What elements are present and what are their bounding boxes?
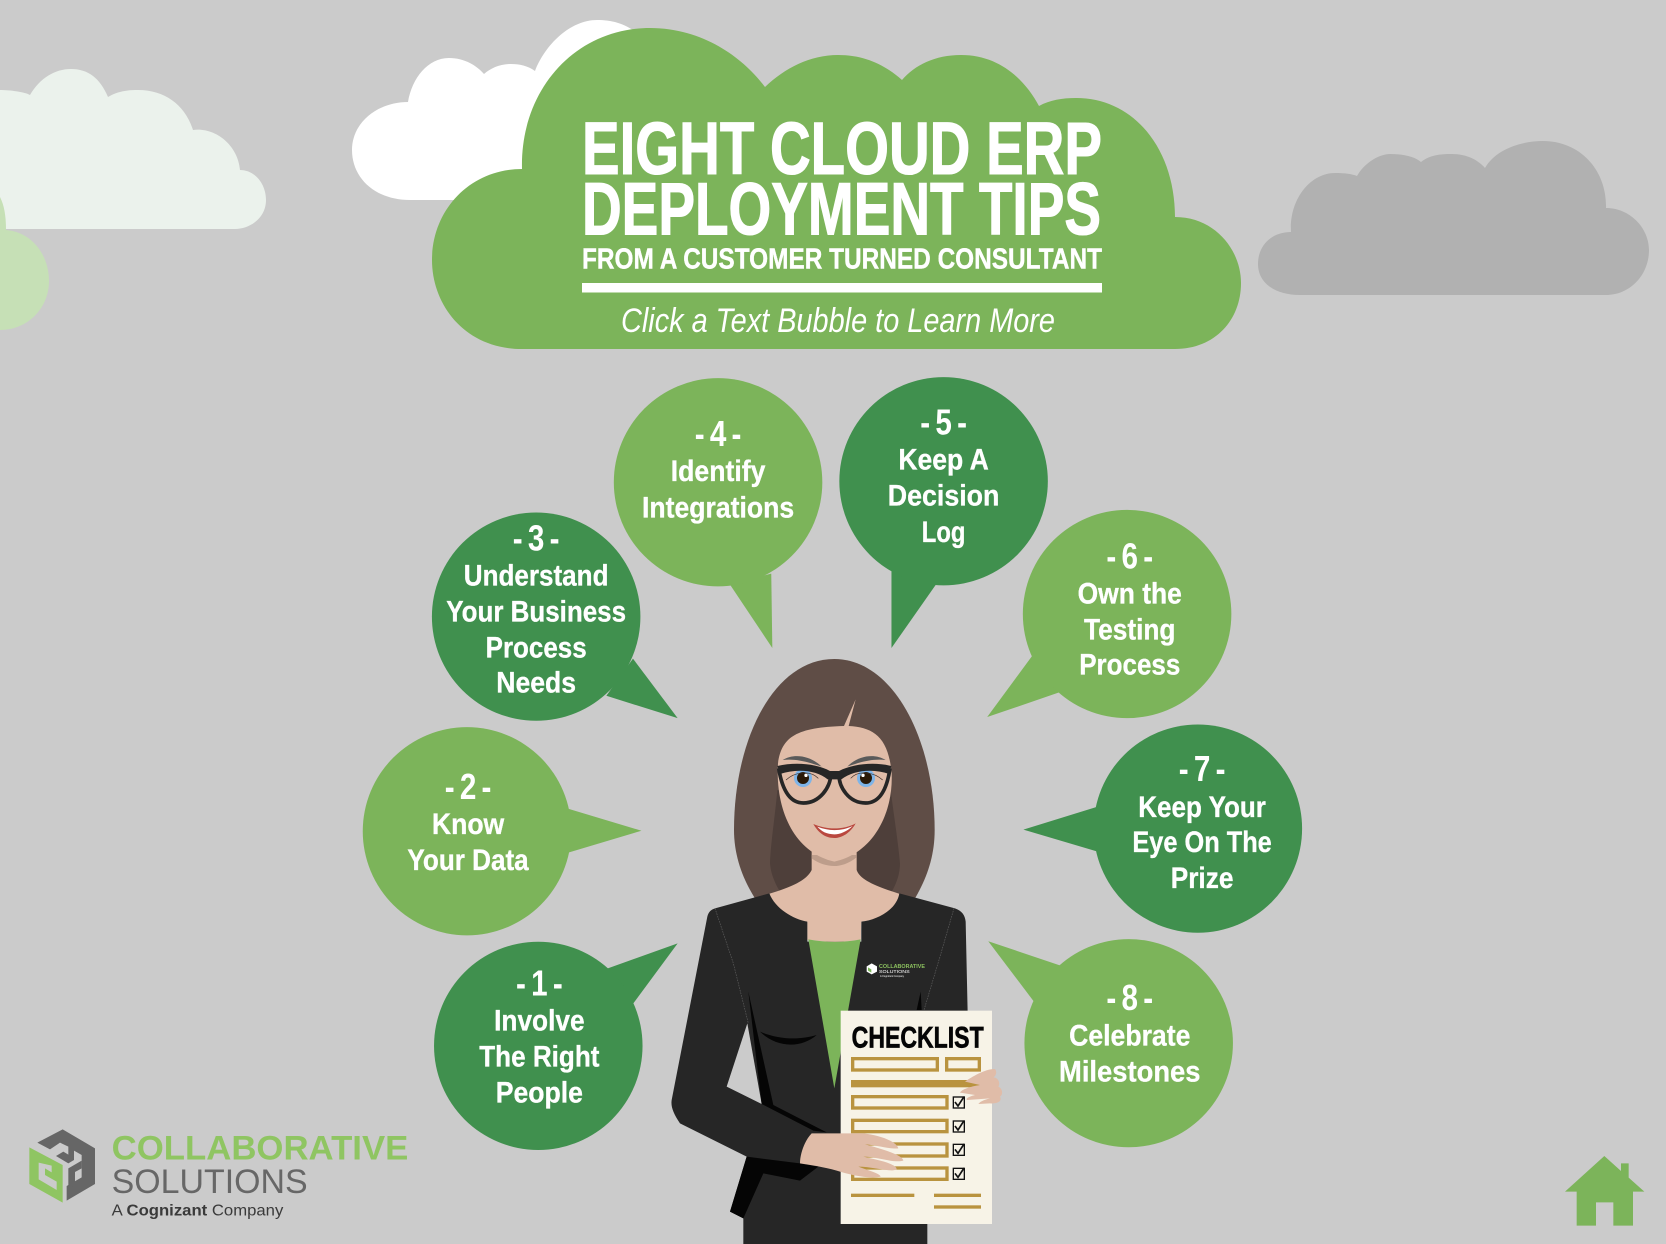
- bubble 4: Identify Integrations: Identify: [671, 456, 766, 488]
- jacket: [671, 893, 968, 1244]
- eyebrows: [783, 756, 886, 767]
- cloud: pale green left edge: [0, 197, 49, 330]
- bubble 1: Involve The Right People: [434, 942, 678, 1150]
- panel: title cloud: [432, 28, 1241, 349]
- bubble 5: Keep A Decision Log: -5-: [920, 403, 972, 443]
- icon: home: [1565, 1156, 1644, 1226]
- bubble 3: Understand Your Business Process Needs: -3-: [513, 519, 565, 559]
- bubble 4: Identify Integrations: -4-: [695, 414, 747, 455]
- jacket logo: A Cognizant Company: [880, 974, 904, 978]
- logo wordmark second line: SOLUTIONS: [112, 1163, 308, 1201]
- bubble 5: Keep A Decision Log: Keep A: [898, 445, 989, 477]
- bubble 2: Know Your Data: [363, 727, 641, 935]
- bubble 1: Involve The Right People: Involve: [494, 1005, 585, 1037]
- green cloud shape: [432, 28, 1241, 349]
- illustration: consultant head: [734, 659, 935, 940]
- checkboxes: [953, 1097, 964, 1179]
- sleeve gap: [727, 1023, 762, 1104]
- bubble 8: Celebrate Milestones: -8-: [1106, 979, 1158, 1019]
- bubble 6: Own the Testing Process: -6-: [1106, 537, 1158, 577]
- checklist lines: [851, 1080, 981, 1209]
- bubble 3: Understand Your Business Process Needs: Understand: [464, 560, 608, 592]
- checklist fields: [853, 1059, 979, 1179]
- bubble 5: Keep A Decision Log: Decision: [888, 481, 999, 513]
- bubble 8: Celebrate Milestones: [988, 939, 1233, 1147]
- click prompt: Click a Text Bubble to Learn More: [621, 302, 1055, 340]
- bubble 6: Own the Testing Process: Own the: [1078, 578, 1182, 610]
- jacket logo: SOLUTIONS: [879, 969, 910, 975]
- bubble 1: Involve The Right People: The Right: [479, 1042, 600, 1074]
- jacket shadows: [730, 992, 922, 1218]
- title: EIGHT CLOUD ERP: [582, 107, 1102, 190]
- subtitle: FROM A CUSTOMER TURNED CONSULTANT: [582, 244, 1102, 276]
- logo wordmark: COLLABORATIVE: [112, 1130, 408, 1168]
- bubble 4: Identify Integrations: [614, 378, 822, 648]
- bubble 3: Understand Your Business Process Needs: [432, 513, 678, 721]
- cloud: pale left: [0, 69, 266, 229]
- face: [778, 699, 892, 862]
- hand on sleeve: [800, 1133, 903, 1177]
- logo cube icon: [29, 1129, 95, 1203]
- logo tagline: A Cognizant Company: [112, 1203, 283, 1220]
- bubble 4: Identify Integrations: Integrations: [642, 492, 794, 524]
- bubble 5: Keep A Decision Log: Log: [922, 517, 965, 549]
- mouth: [813, 823, 856, 838]
- cloud: gray right: [1258, 141, 1649, 295]
- green shirt: [808, 939, 861, 1088]
- company logo: [29, 1129, 408, 1220]
- bubble 7: Keep Your Eye On The Prize: -7-: [1179, 749, 1231, 790]
- bubble 3: Understand Your Business Process Needs: Process: [486, 633, 587, 665]
- neck base: [807, 920, 861, 942]
- bubble 7: Keep Your Eye On The Prize: Prize: [1171, 863, 1233, 895]
- title: DEPLOYMENT TIPS: [582, 168, 1101, 250]
- checklist heading: CHECKLIST: [852, 1021, 984, 1054]
- eyes: [786, 769, 883, 787]
- bubble 1: Involve The Right People: People: [496, 1078, 583, 1110]
- bubble 6: Own the Testing Process: Testing: [1084, 615, 1175, 646]
- bubble 7: Keep Your Eye On The Prize: Eye On The: [1132, 827, 1272, 859]
- bubble 5: Keep A Decision Log: [839, 377, 1048, 648]
- bubble 3: Understand Your Business Process Needs: Your Business: [446, 596, 626, 628]
- jacket logo: [867, 963, 925, 978]
- chin shadow: [812, 855, 857, 866]
- bubble 6: Own the Testing Process: [987, 510, 1231, 718]
- neck: [768, 850, 900, 940]
- title: [582, 107, 1102, 250]
- inner hair shadow: [770, 790, 900, 892]
- bubble 6: Own the Testing Process: Process: [1079, 650, 1180, 682]
- bubble 7: Keep Your Eye On The Prize: [1023, 724, 1302, 933]
- illustration: consultant body: [671, 893, 1002, 1244]
- bubble 1: Involve The Right People: -1-: [516, 964, 568, 1004]
- bubble 7: Keep Your Eye On The Prize: Keep Your: [1138, 792, 1266, 824]
- hand at paper edge: [960, 1069, 1002, 1104]
- speech bubbles group: [363, 377, 1302, 1150]
- hair: [734, 659, 935, 898]
- title rule: [582, 283, 1102, 292]
- bubble 2: Know Your Data: Your Data: [407, 845, 529, 877]
- bubble 8: Celebrate Milestones: Celebrate: [1069, 1020, 1190, 1052]
- bubble 3: Understand Your Business Process Needs: Needs: [496, 668, 576, 700]
- bubble 2: Know Your Data: Know: [432, 809, 504, 841]
- panel: checklist paper: [841, 1011, 992, 1224]
- bubble 2: Know Your Data: -2-: [445, 767, 497, 808]
- jacket logo: COLLABORATIVE: [879, 964, 925, 970]
- bubble 8: Celebrate Milestones: Milestones: [1059, 1056, 1200, 1088]
- jacket seams: [715, 908, 954, 1023]
- cloud: white behind title: [352, 20, 645, 200]
- glasses: [777, 764, 891, 803]
